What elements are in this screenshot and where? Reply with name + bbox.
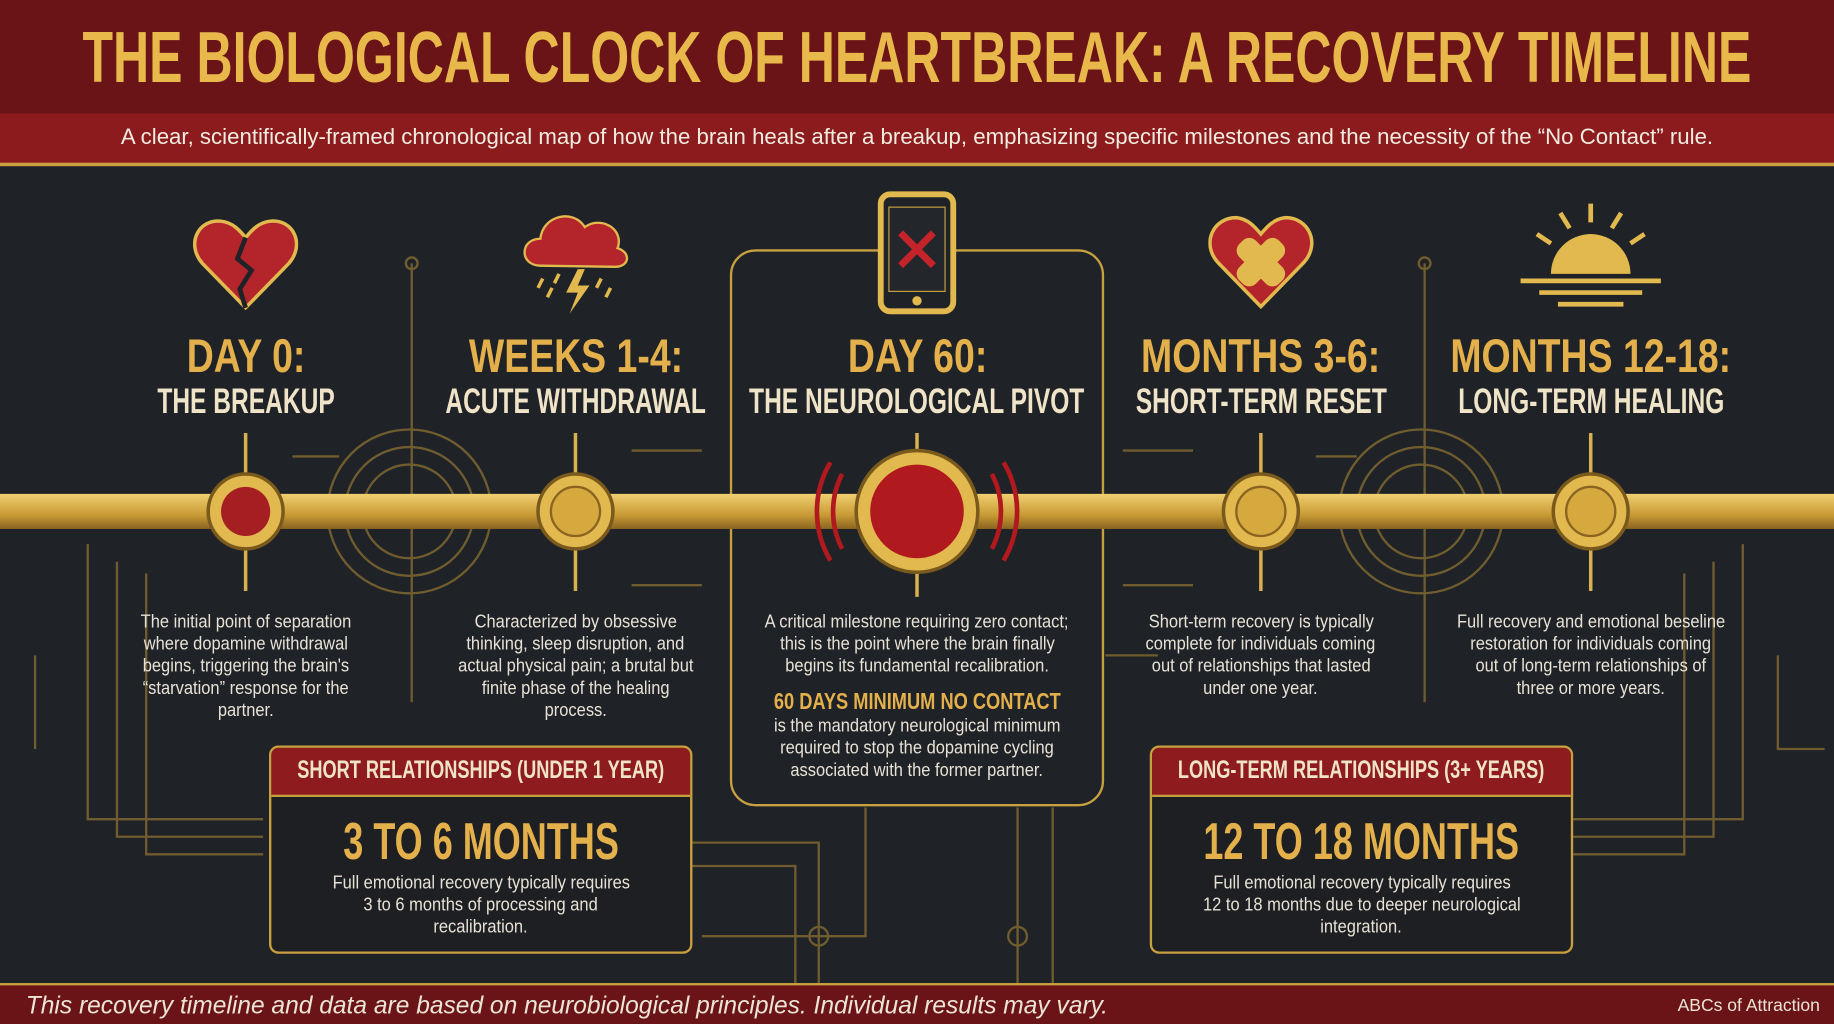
milestone: weeks 1-4: Characterized by obsessive xyxy=(474,612,677,632)
callout: short relationships: recalibration. xyxy=(434,918,528,937)
milestone: day 0: DAY 0: xyxy=(186,331,305,383)
callout: short relationships: SHORT RELATIONSHIPS (UNDER 1 YEAR) xyxy=(297,757,664,784)
footer credit: ABCs of Attraction xyxy=(1678,996,1820,1016)
callout: short relationships xyxy=(269,745,692,954)
callout: long-term relationships: LONG-TERM RELATIONSHIPS (3+ YEARS) xyxy=(1178,757,1545,784)
milestone: months 3-6: out of relationships that lasted xyxy=(1151,657,1370,676)
milestone: day 60: is the mandatory neurological minimum xyxy=(774,716,1060,736)
milestone: weeks 1-4: actual physical pain; a brutal but xyxy=(458,657,693,676)
milestone: day 60: this is the point where the brain finally xyxy=(780,634,1054,654)
callout: short relationships: 3 TO 6 MONTHS xyxy=(343,813,618,871)
footer disclaimer: This recovery timeline and data are based on neurobiological principles. Individual results may vary. xyxy=(26,992,1108,1019)
milestone: day 60: THE NEUROLOGICAL PIVOT xyxy=(749,383,1085,421)
milestone: months 12-18: LONG-TERM HEALING xyxy=(1458,383,1724,421)
milestone: weeks 1-4: WEEKS 1-4: xyxy=(468,331,683,383)
milestone: weeks 1-4: process. xyxy=(544,701,607,721)
footer xyxy=(0,983,1834,1024)
milestone: day 0: “starvation” response for the xyxy=(143,679,349,699)
milestone: months 3-6 xyxy=(1135,331,1387,699)
milestone: day 0: where dopamine withdrawal xyxy=(144,634,348,654)
callout: long-term relationships: 12 to 18 months due to deeper neurological xyxy=(1203,895,1520,915)
callout: long-term relationships: Full emotional recovery typically requires xyxy=(1213,873,1510,893)
callout: long-term relationships xyxy=(1150,745,1573,954)
title band xyxy=(0,0,1834,114)
icon: sunset xyxy=(1520,204,1661,307)
callout: short relationships: 3 to 6 months of processing and xyxy=(364,895,598,915)
milestone: months 12-18: three or more years. xyxy=(1517,679,1665,699)
milestone: day 60: associated with the former partner. xyxy=(791,761,1043,781)
milestone: day 60: A critical milestone requiring zero contact; xyxy=(765,612,1069,632)
milestone: weeks 1-4: finite phase of the healing xyxy=(482,679,669,699)
icon: storm cloud xyxy=(523,215,628,314)
milestone: weeks 1-4 xyxy=(445,331,706,721)
subtitle: A clear, scientifically-framed chronological map of how the brain heals after a breakup, emphasizing specific milestones and the necessity of the “No Contact” rule. xyxy=(121,125,1713,150)
subtitle band xyxy=(0,114,1834,166)
callout: long-term relationships: 12 TO 18 MONTHS xyxy=(1204,813,1519,871)
milestone: months 12-18: MONTHS 12-18: xyxy=(1450,331,1731,383)
milestone: months 3-6: SHORT-TERM RESET xyxy=(1135,383,1386,421)
milestone: months 3-6: MONTHS 3-6: xyxy=(1141,331,1380,383)
icon: phone with X xyxy=(878,191,956,314)
milestone: day 0: The initial point of separation xyxy=(140,612,351,632)
timeline bar xyxy=(0,494,1834,529)
milestone: day 60: required to stop the dopamine cycling xyxy=(780,738,1054,758)
milestone: day 60: 60 DAYS MINIMUM NO CONTACT xyxy=(774,689,1060,715)
milestone: months 12-18 xyxy=(1450,331,1731,699)
callout: short relationships: Full emotional recovery typically requires xyxy=(332,873,629,893)
milestone: weeks 1-4: thinking, sleep disruption, and xyxy=(467,634,684,654)
milestone: day 0: THE BREAKUP xyxy=(157,383,334,421)
title: THE BIOLOGICAL CLOCK OF HEARTBREAK: A RECOVERY TIMELINE xyxy=(83,18,1751,98)
milestone: day 60 xyxy=(749,331,1085,781)
milestone: day 60: begins its fundamental recalibration. xyxy=(785,657,1049,676)
milestone: day 0: begins, triggering the brain's xyxy=(142,657,349,676)
center panel frame xyxy=(730,249,1104,806)
milestone: months 3-6: under one year. xyxy=(1204,679,1318,699)
milestone: weeks 1-4: ACUTE WITHDRAWAL xyxy=(445,383,706,421)
milestone: day 60: DAY 60: xyxy=(847,331,987,383)
milestone: months 12-18: out of long-term relationships of xyxy=(1475,657,1706,676)
milestone: day 0: partner. xyxy=(218,701,274,721)
icon: broken heart xyxy=(193,219,298,310)
milestone: months 12-18: Full recovery and emotional beseline xyxy=(1457,612,1725,632)
milestone: day 0 xyxy=(140,331,351,721)
milestone: months 3-6: Short-term recovery is typically xyxy=(1148,612,1373,632)
milestone: months 12-18: restoration for individuals coming xyxy=(1470,634,1711,654)
milestone: months 3-6: complete for individuals coming xyxy=(1146,634,1376,654)
callout: long-term relationships: integration. xyxy=(1321,918,1402,937)
icon: bandaged heart xyxy=(1208,216,1314,310)
